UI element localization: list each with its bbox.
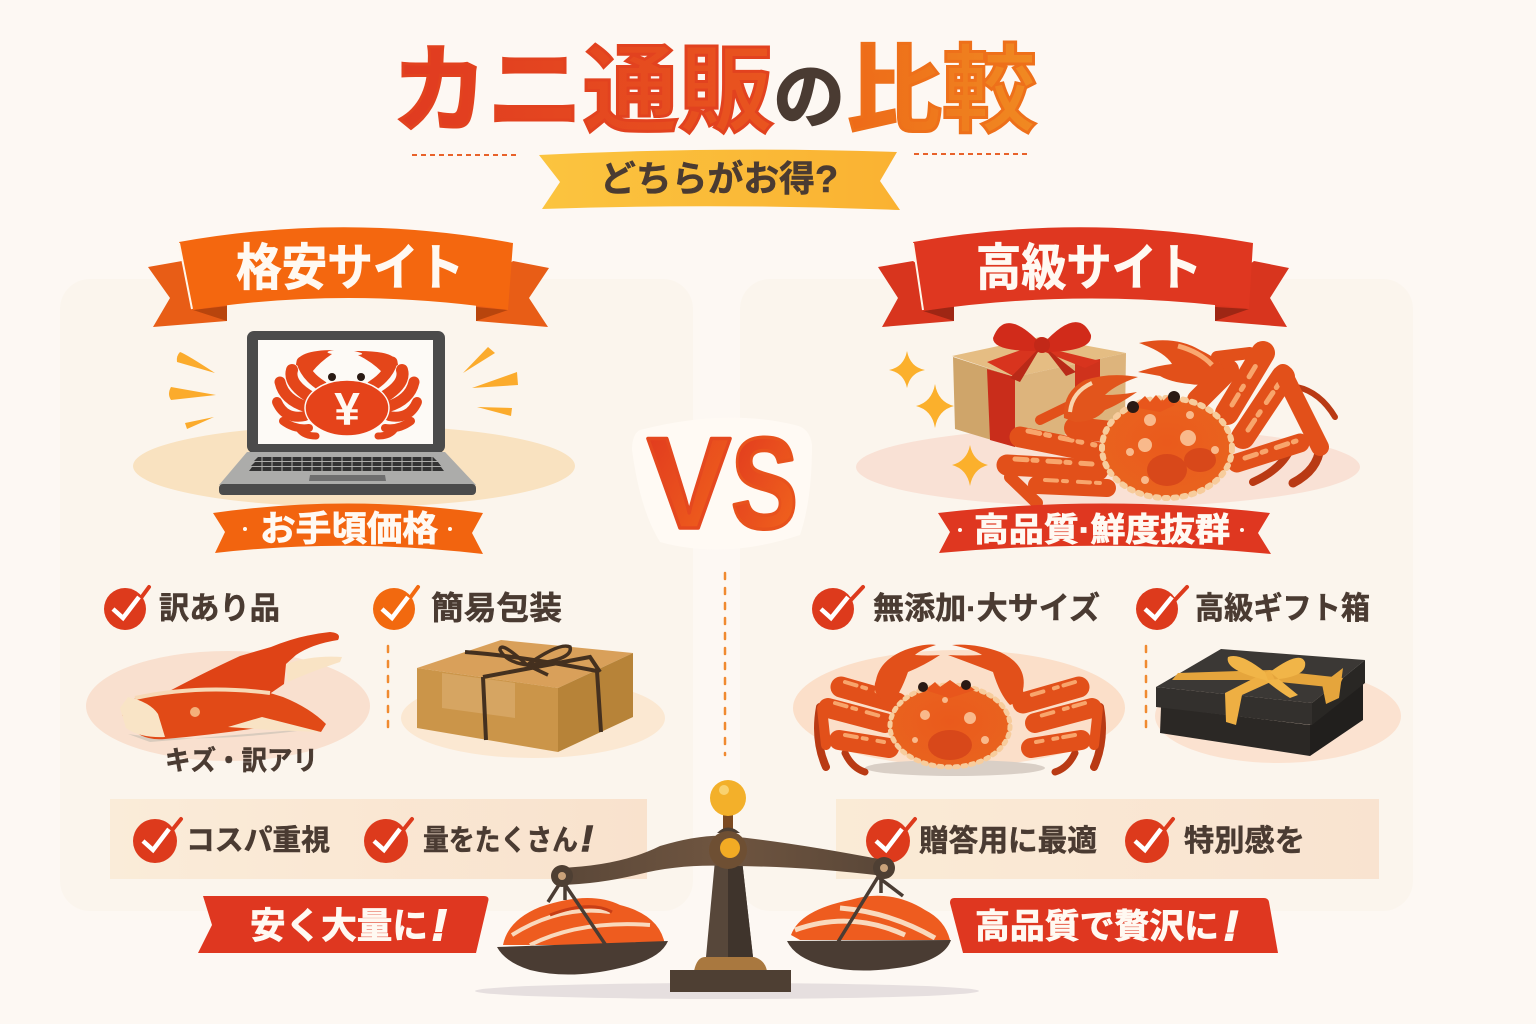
title: 比較 (847, 38, 1037, 145)
check item: value for money (133, 819, 330, 863)
VS badge: S (731, 410, 798, 556)
check item: luxury gift box: 高級ギフト箱 (1195, 591, 1370, 626)
left pan with crab (497, 880, 668, 975)
callout ribbon: high quality luxury (950, 898, 1278, 953)
scale pivot and knob (723, 815, 733, 830)
check item: ideal for gifts (866, 819, 1097, 863)
check item: special feeling (1125, 819, 1305, 863)
platform ellipse: cardboard box (401, 678, 665, 758)
balance scale (475, 780, 979, 999)
scale beam (558, 836, 884, 885)
platform ellipse: claws (86, 651, 370, 761)
burst lines (169, 347, 518, 429)
heading ribbon: budget sites: 格安サイト (236, 240, 464, 296)
check item: simple packaging: 簡易包装 (431, 590, 562, 626)
callout ribbon: cheap and plenty: 安く大量に (250, 905, 428, 946)
icon: black gift box (1156, 649, 1365, 756)
right pan with crab (787, 877, 951, 970)
icon: large snow crab (1007, 340, 1335, 503)
platform ellipse (856, 427, 1360, 507)
platform ellipse: black box (1155, 669, 1401, 763)
icon: whole crab (818, 645, 1102, 772)
check item: large quantity: ! (581, 818, 593, 859)
feature bar: premium (836, 799, 1379, 879)
check item: large quantity: 量をたくさん (423, 825, 578, 857)
callout ribbon: high quality luxury: 高品質で贅沢に (975, 908, 1219, 946)
divider: premium items (1145, 646, 1147, 728)
icon: crab with yen sign (277, 350, 417, 436)
icon: crab claws (120, 632, 342, 742)
VS badge: V (647, 410, 731, 556)
subtitle ribbon: どちらがお得 (600, 158, 815, 199)
callout ribbon: cheap and plenty (198, 896, 488, 953)
sub ribbon: affordable price (213, 504, 483, 554)
subtitle ribbon: ? (815, 159, 838, 201)
title: の (773, 58, 845, 138)
check item: outlet goods (104, 587, 280, 630)
icon: gift box (952, 322, 1126, 447)
sub ribbon: affordable price: お手頃価格 (260, 510, 438, 549)
heading ribbon: budget sites (148, 227, 549, 327)
title: カニ通販 (392, 38, 774, 145)
callout ribbon: cheap and plenty: ! (432, 901, 447, 950)
heading ribbon: premium sites (878, 227, 1289, 327)
check item: outlet goods: 訳あり品 (159, 591, 280, 626)
check item: large quantity (364, 818, 593, 863)
sub ribbon: high quality and freshness: 高品質·鮮度抜群 (974, 511, 1230, 548)
check item: ideal for gifts: 贈答用に最適 (919, 825, 1097, 858)
panel: premium sites background (740, 279, 1413, 911)
icon: laptop with crab (219, 331, 476, 495)
feature bar: budget (110, 799, 647, 879)
panel content: budget sites (86, 227, 665, 953)
platform ellipse: crab (793, 650, 1125, 766)
sub ribbon: high quality and freshness (938, 504, 1271, 554)
panel: budget sites background (60, 279, 693, 911)
check item: additive free and large size (812, 587, 1100, 630)
divider: budget items (387, 646, 389, 728)
callout ribbon: high quality luxury: ! (1224, 902, 1238, 949)
label: damaged goods: キズ・訳アリ (165, 745, 318, 776)
scale column (706, 860, 753, 957)
icon: crab with yen sign: ¥ (334, 383, 360, 435)
heading ribbon: premium sites: 高級サイト (976, 240, 1202, 296)
check item: value for money: コスパ重視 (186, 824, 330, 857)
check item: simple packaging (373, 587, 562, 630)
panel content: premium sites (793, 227, 1401, 953)
scale shadow (475, 983, 979, 999)
icon: sparkles (889, 351, 988, 486)
platform ellipse (133, 425, 575, 507)
icon: cardboard box with string (417, 640, 633, 752)
check item: additive free and large size: 無添加·大サイズ (873, 591, 1100, 626)
check item: luxury gift box (1136, 587, 1370, 630)
title (392, 38, 1037, 145)
subtitle ribbon (539, 150, 900, 210)
check item: special feeling: 特別感を (1184, 825, 1305, 858)
VS badge (632, 410, 812, 556)
